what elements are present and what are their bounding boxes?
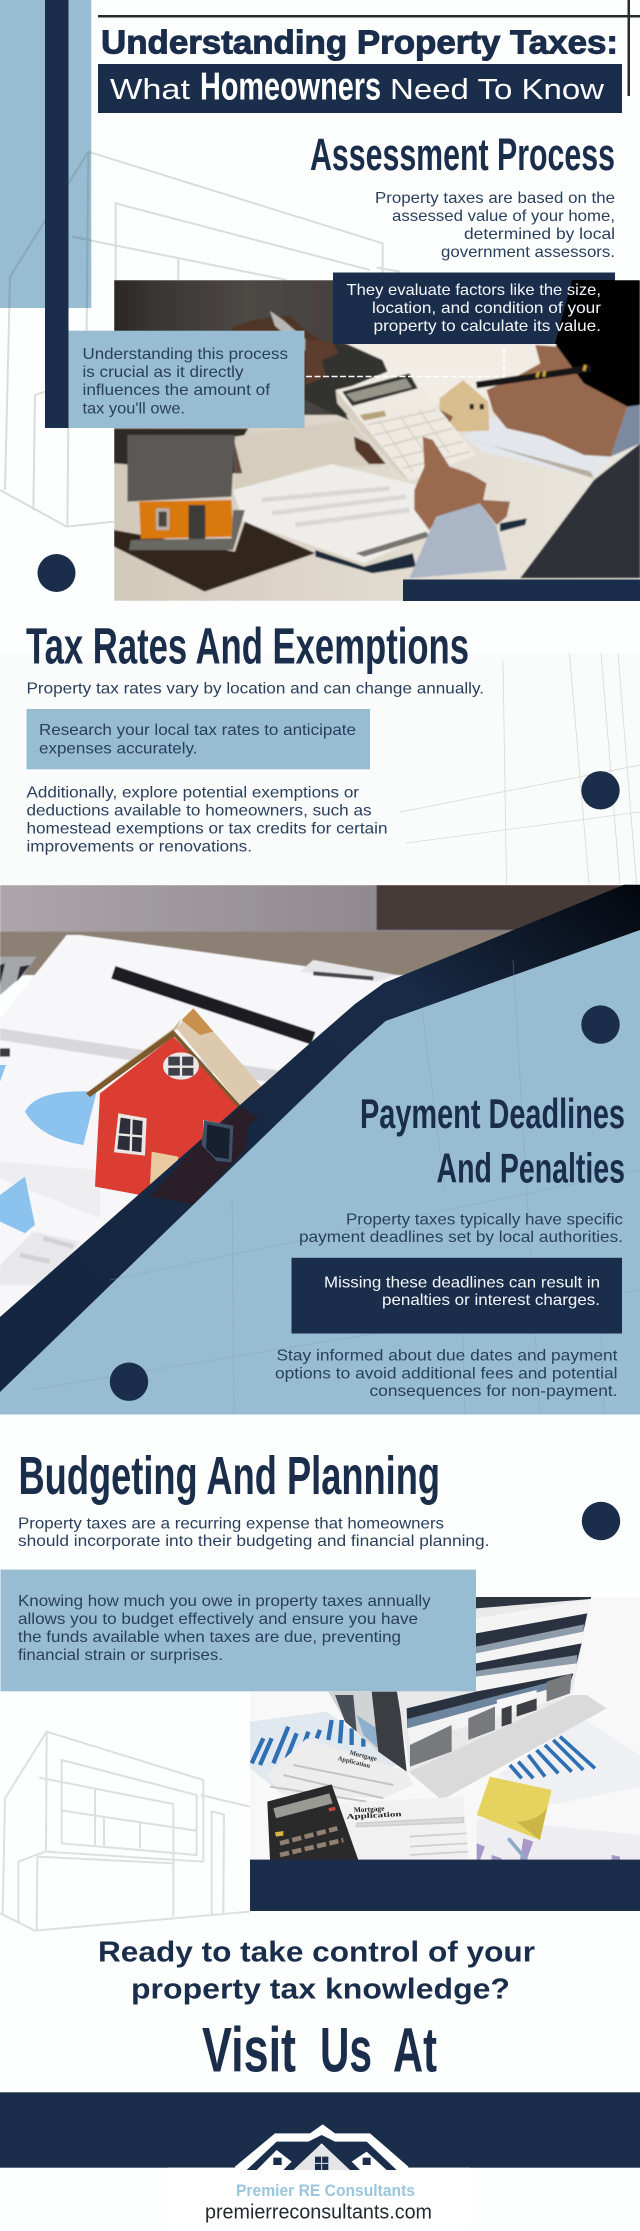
callout: missing deadlines: Missing these deadlines can result in (324, 1274, 600, 1291)
callout: understanding this process (68, 331, 304, 428)
model house seen through the band (150, 1107, 258, 1204)
callout: knowing how much you owe (0, 1570, 476, 1691)
navy accent strip under photo (403, 580, 640, 601)
title line one: Understanding Property Taxes: (101, 23, 618, 60)
title banner: Need To Know (390, 74, 605, 106)
visit us at heading: At (393, 2016, 437, 2086)
navy block under photo (250, 1860, 640, 1911)
navy dot (582, 1502, 620, 1540)
panel: assessment process (0, 0, 640, 601)
callout: research local rates: Research your local tax rates to anticipate (39, 722, 356, 739)
stay informed text: options to avoid additional fees and potential (275, 1365, 618, 1382)
model house (86, 1008, 262, 1205)
navy dot upper (581, 1005, 620, 1044)
blue panel (0, 930, 640, 1414)
callout: understanding this process: tax you'll owe. (82, 400, 185, 418)
callout: knowing how much you owe: the funds available when taxes are due, preventing (18, 1629, 401, 1646)
callout: knowing how much you owe: Knowing how much you owe in property taxes annually (18, 1593, 431, 1610)
assessment intro text (375, 190, 615, 261)
callout: evaluate factors: They evaluate factors like the size, (346, 282, 601, 299)
callout: missing deadlines: penalties or interest charges. (382, 1292, 600, 1309)
payment intro text (299, 1211, 623, 1246)
logo background (168, 2168, 470, 2231)
navy dot (581, 771, 620, 810)
visit us at heading: Us (320, 2016, 372, 2086)
navy dot lower (110, 1362, 148, 1401)
navy vertical bar (45, 0, 68, 428)
navy dot (38, 554, 76, 592)
callout: knowing how much you owe: financial strain or surprises. (18, 1647, 223, 1664)
stay informed text: consequences for non-payment. (370, 1383, 618, 1400)
budgeting intro text: Property taxes are a recurring expense that homeowners (18, 1515, 444, 1532)
exemptions paragraph: homestead exemptions or tax credits for certain (26, 820, 388, 838)
callout: understanding this process: is crucial as it directly (82, 364, 244, 381)
callout: knowing how much you owe: allows you to budget effectively and ensure you have (18, 1611, 418, 1628)
top rule line (98, 15, 640, 18)
assessment intro text: Property taxes are based on the (375, 190, 615, 207)
photo: building model and mortgage papers (250, 1595, 640, 1865)
callout: understanding this process: Understanding this process (82, 346, 288, 363)
assessment intro text: government assessors. (441, 244, 615, 261)
budgeting intro text (18, 1515, 490, 1550)
blue chart shapes (0, 1065, 97, 1233)
panel: budgeting and planning (0, 1446, 640, 1931)
photo: building model and mortgage papers: Application (337, 1755, 371, 1770)
panel: tax rates and exemptions (26, 617, 640, 884)
heading: budgeting and planning: Budgeting And Planning (18, 1446, 440, 1506)
exemptions paragraph: improvements or renovations. (26, 838, 252, 856)
panel: payment deadlines (0, 885, 640, 1418)
footer (0, 2092, 640, 2231)
website address: premierreconsultants.com (205, 2201, 432, 2223)
logo: rooftop house (235, 2124, 408, 2170)
title banner (98, 64, 622, 113)
callout: evaluate factors (333, 272, 615, 344)
navy footer band (0, 2092, 640, 2168)
cta question (98, 1937, 535, 2005)
visit us at heading: Visit (202, 2016, 296, 2086)
exemptions paragraph: deductions available to homeowners, such as (26, 802, 372, 819)
stay informed text (275, 1347, 618, 1400)
visit us at heading (202, 2016, 437, 2086)
photo: building model and mortgage papers: Application (346, 1809, 402, 1821)
callout: evaluate factors: property to calculate its value. (374, 318, 601, 335)
right vertical rule (628, 0, 630, 96)
title banner: Homeowners (200, 66, 381, 108)
title banner: What (110, 74, 190, 106)
callout: understanding this process: influences the amount of (82, 382, 271, 399)
assessment intro text: assessed value of your home, (392, 208, 615, 225)
callout: missing deadlines (292, 1258, 622, 1334)
dashed connector line (306, 349, 504, 376)
tax rates intro: Property tax rates vary by location and can change annually. (26, 680, 484, 697)
faint line pattern on blue (30, 960, 640, 1414)
payment intro text: Property taxes typically have specific (346, 1211, 623, 1228)
exemptions paragraph: Additionally, explore potential exemptions or (26, 784, 360, 801)
diagonal navy band (0, 885, 640, 1392)
cta question: property tax knowledge? (131, 1973, 510, 2005)
budgeting intro text: should incorporate into their budgeting and financial planning. (18, 1533, 490, 1550)
cta question: Ready to take control of your (98, 1937, 535, 1969)
decorative light blue block (0, 0, 91, 308)
callout: research local rates: expenses accurately. (39, 740, 198, 757)
wireframe building outline (0, 152, 400, 527)
photo: red model house on papers (0, 885, 640, 1286)
company name: Premier RE Consultants (236, 2181, 415, 2200)
exemptions paragraph (26, 784, 388, 856)
photo: hands with calculator and model house (114, 280, 640, 601)
call to action (98, 1937, 535, 2086)
callout: evaluate factors: location, and condition of your (372, 300, 602, 317)
heading: payment deadlines (360, 1090, 625, 1191)
faint line pattern (400, 653, 640, 884)
photo: building model and mortgage papers: Mortgage (349, 1749, 377, 1763)
photo: building model and mortgage papers: Mortgage (354, 1804, 385, 1814)
wireframe building outline (0, 1732, 250, 1931)
callout: research local rates (26, 709, 370, 769)
stay informed text: Stay informed about due dates and payment (276, 1347, 618, 1364)
assessment intro text: determined by local (464, 226, 615, 243)
payment intro text: payment deadlines set by local authorities. (299, 1229, 623, 1246)
